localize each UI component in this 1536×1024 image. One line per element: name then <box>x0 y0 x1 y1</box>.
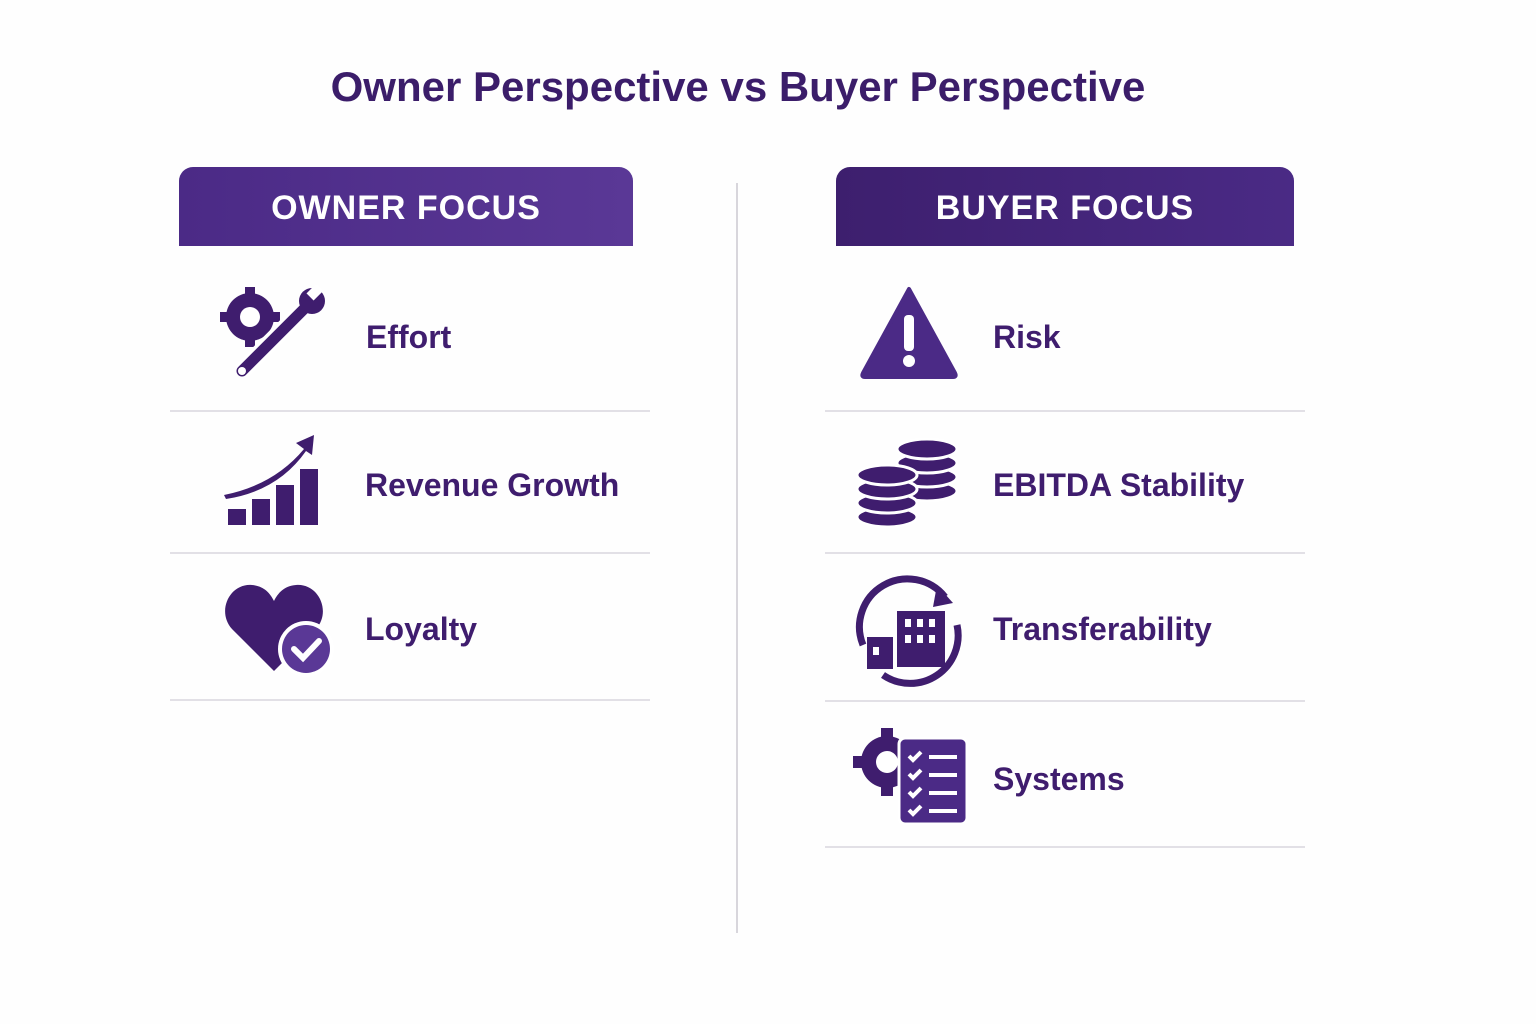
label: ebitda stability: EBITDA Stability <box>993 467 1244 503</box>
icon: coin stacks <box>858 440 956 526</box>
divider <box>736 183 738 933</box>
icon: gear and wrench <box>220 287 325 376</box>
icon: systems <box>853 728 966 822</box>
label: loyalty: Loyalty <box>365 611 477 647</box>
header: buyer focus: BUYER FOCUS <box>936 189 1194 227</box>
icon: warning triangle <box>860 286 958 379</box>
label: systems: Systems <box>993 761 1125 797</box>
icon: growth chart <box>224 435 318 525</box>
header: buyer focus <box>836 167 1294 246</box>
title: Owner Perspective vs Buyer Perspective <box>331 63 1145 110</box>
header: owner focus <box>179 167 633 246</box>
panel: buyer focus <box>825 167 1305 848</box>
header: owner focus: OWNER FOCUS <box>271 189 541 227</box>
icon: transferability <box>856 575 962 687</box>
label: revenue growth: Revenue Growth <box>365 467 619 503</box>
icon: heart check <box>225 584 330 673</box>
label: risk: Risk <box>993 319 1061 355</box>
panel: owner focus <box>170 167 650 701</box>
label: effort: Effort <box>366 319 451 355</box>
label: transferability: Transferability <box>993 611 1212 647</box>
